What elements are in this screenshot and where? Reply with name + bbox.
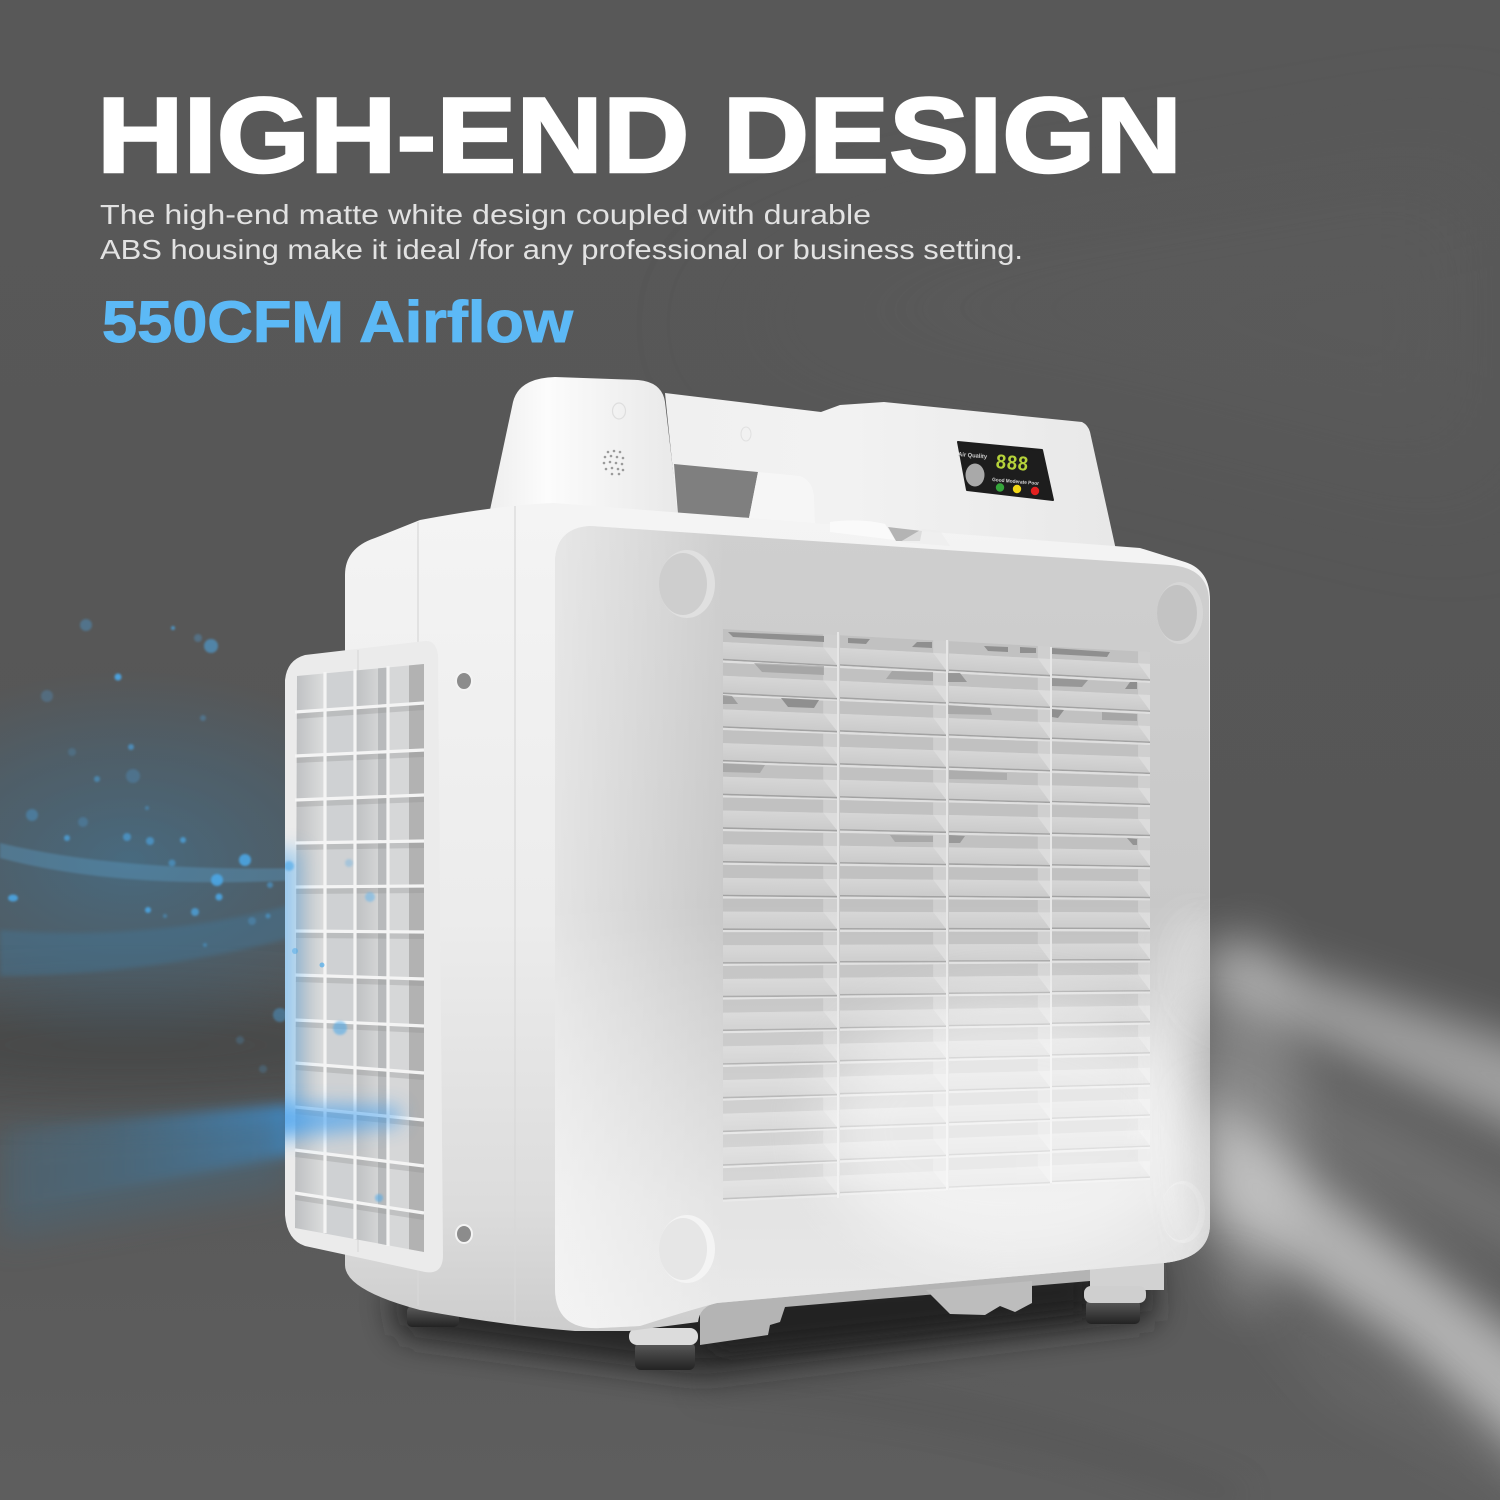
handle bar and control housing bbox=[665, 393, 1116, 550]
exhaust air beams bbox=[1200, 930, 1500, 1500]
blue intake airflow and particles bbox=[0, 619, 430, 1240]
main housing bbox=[345, 503, 1210, 1331]
description text bbox=[100, 199, 1023, 265]
vent grid bars bbox=[295, 666, 424, 1246]
handle left pillar bbox=[490, 377, 680, 530]
description text: ABS housing make it ideal /for any professional or business setting. bbox=[100, 234, 1023, 265]
front face bbox=[555, 520, 1210, 1330]
corner bosses bbox=[659, 550, 1205, 1283]
vent cells bbox=[295, 660, 424, 1260]
side vent frame bbox=[285, 642, 443, 1272]
top latch bbox=[830, 520, 950, 546]
air purifier unit bbox=[250, 377, 1245, 1370]
air quality control panel: 888 bbox=[994, 452, 1029, 478]
description text: The high-end matte white design coupled with durable bbox=[100, 199, 871, 230]
louvre grille bbox=[723, 629, 1150, 1202]
title: HIGH-END DESIGN bbox=[97, 75, 1182, 195]
column dividers bbox=[838, 632, 1051, 1198]
right foot bbox=[1084, 1255, 1164, 1324]
rear foot bbox=[407, 1306, 459, 1327]
air quality control panel: Air Quality bbox=[958, 452, 988, 461]
side crease lines bbox=[418, 506, 515, 1322]
speaker grille bbox=[603, 450, 624, 475]
blue tint over vent bbox=[285, 838, 412, 1203]
mounting screw holes bbox=[456, 672, 472, 1243]
air quality control panel: Good Moderate Poor bbox=[992, 477, 1039, 487]
front foot bbox=[629, 1328, 698, 1370]
dark slots visible through louvres bbox=[723, 632, 1137, 845]
front mist on housing bbox=[578, 922, 1210, 1326]
airflow heading: 550CFM Airflow bbox=[102, 290, 574, 355]
floor shadow bbox=[390, 1255, 1155, 1375]
handle window bbox=[674, 464, 758, 518]
air quality control panel bbox=[958, 442, 1053, 500]
underside strip and latch bbox=[700, 1262, 1090, 1345]
